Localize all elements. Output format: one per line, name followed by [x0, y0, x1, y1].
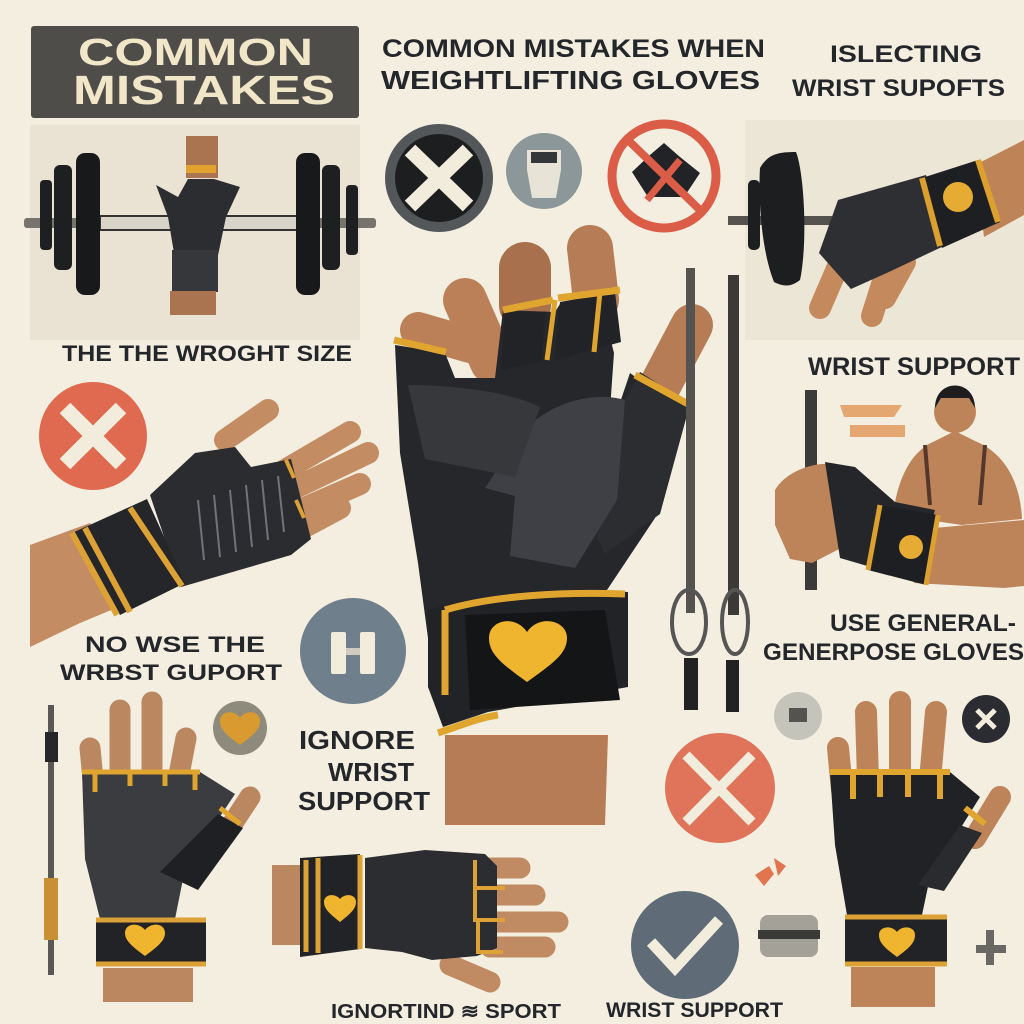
label: wrist support bottom: WRIST SUPPORT	[606, 999, 783, 1022]
heading: selecting wrist support: WRIST SUPOFTS	[792, 75, 1005, 102]
icon: check circle	[631, 891, 739, 999]
fingers	[418, 248, 692, 395]
heading: selecting wrist support: ISLECTING	[830, 41, 982, 68]
panel: barbell background	[30, 125, 360, 340]
icon: small grey clasp	[976, 930, 1006, 965]
title: COMMON	[78, 32, 313, 74]
glove palm	[394, 290, 690, 653]
label: ignore wrist support: WRIST	[328, 757, 414, 787]
heart	[489, 621, 567, 682]
icon: small grey badge	[774, 692, 822, 740]
icon: barbell and gripped glove top right	[728, 140, 1024, 316]
central glove	[394, 248, 692, 825]
icon: glove bottom center	[272, 850, 558, 982]
icon: red x circle bottom	[665, 733, 775, 843]
heading: common mistakes when weightlifting gloves: COMMON MISTAKES WHEN	[382, 35, 765, 63]
label: use general-purpose gloves: USE GENERAL-	[830, 610, 1016, 637]
icon: glove bottom right	[830, 702, 1000, 1007]
label: use general-purpose gloves: GENERPOSE GLOVES	[763, 639, 1024, 666]
wrist strap	[428, 591, 628, 733]
title: MISTAKES	[73, 67, 335, 113]
icon: small x circle	[962, 695, 1010, 743]
icon: glove hand open, left	[30, 410, 368, 647]
label: ignore wrist support: IGNORE	[299, 725, 415, 755]
icon: barbell with glove	[24, 136, 376, 315]
icon: tall bars with clasps	[672, 268, 748, 712]
label: use general-purpose gloves	[763, 610, 1024, 666]
icon: prohibition sign	[612, 124, 716, 228]
icon: small heart badge	[220, 712, 260, 745]
label: ignore wrist support: SUPPORT	[298, 786, 430, 816]
icon: left wand	[44, 705, 58, 975]
heading: common mistakes when weightlifting gloves	[381, 35, 765, 95]
label: no wise the wrist support: WRBST GUPORT	[60, 660, 283, 685]
label: wrist support top right: WRIST SUPPORT	[808, 353, 1020, 381]
icon: glove bottom left	[82, 702, 250, 1002]
label: ignorting sport: IGNORTIND ≋ SPORT	[331, 1001, 561, 1023]
icon: H circle	[300, 598, 406, 704]
icon: buckle and sparks	[755, 858, 820, 957]
label: no wise the wrist support	[60, 632, 283, 685]
heading: common mistakes when weightlifting gloves: WEIGHTLIFTING GLOVES	[381, 65, 760, 95]
icon: red x circle	[39, 382, 147, 490]
title	[73, 32, 335, 113]
label: the wrong size: THE THE WROGHT SIZE	[62, 341, 352, 366]
heading: selecting wrist support	[792, 41, 1005, 102]
panel: title banner	[31, 26, 359, 118]
label: no wise the wrist support: NO WSE THE	[85, 632, 265, 657]
label: ignore wrist support	[298, 725, 430, 816]
icon: muscular man with fist	[775, 386, 1024, 590]
icon: small shield circle	[213, 701, 267, 755]
panel: top right background	[745, 120, 1024, 340]
icon: grey circle with glove	[506, 133, 582, 209]
icon: x in black circle	[385, 124, 493, 232]
